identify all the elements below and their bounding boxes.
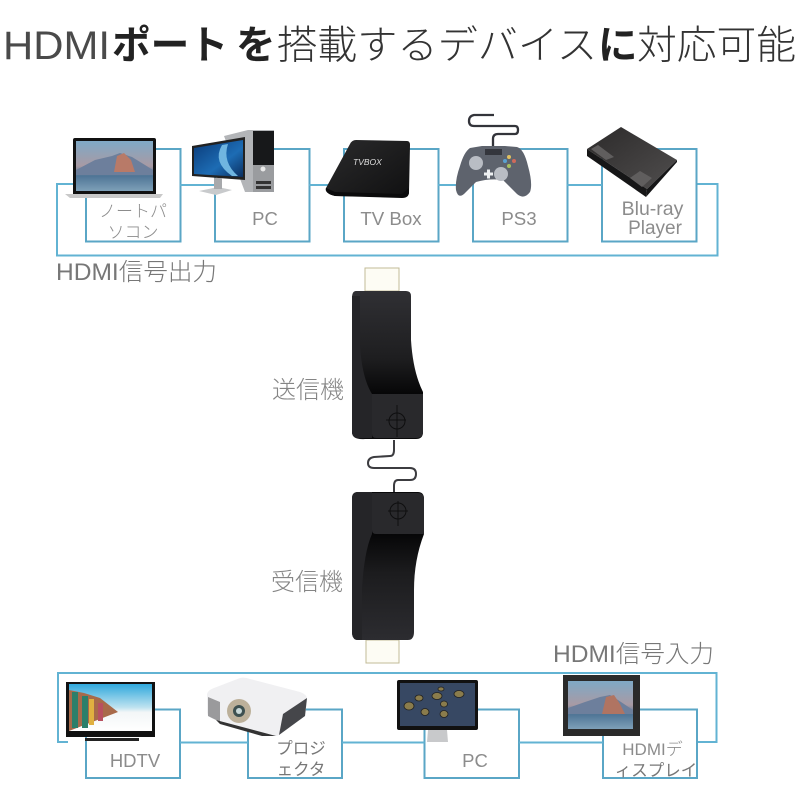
connectors <box>180 184 602 186</box>
output signal frame <box>57 184 718 256</box>
icon: laptop <box>65 138 163 198</box>
device box: projector: ェクタ <box>277 760 325 779</box>
device box: laptop: ノートパ <box>99 202 167 221</box>
icon: Blu-ray player <box>587 127 677 197</box>
title: 搭載するデバイス <box>277 24 597 68</box>
title: ポート <box>112 24 228 68</box>
title: に <box>598 24 638 68</box>
device box: PS3: PS3 <box>501 208 537 229</box>
device box: HDMI display: HDMIデ <box>622 740 683 759</box>
icon: HDTV <box>66 682 155 741</box>
device box: laptop <box>86 149 180 242</box>
connectors <box>180 742 603 744</box>
heading: HDMI output: HDMI信号出力 <box>56 259 217 286</box>
device box: laptop: ソコン <box>108 223 158 242</box>
label: transmitter: 送信機 <box>272 377 344 404</box>
panel: HDMI input devices <box>58 673 716 780</box>
device box: projector <box>248 710 342 779</box>
device box: TV Box <box>344 149 438 242</box>
title: を <box>236 24 276 68</box>
device box: PC: PC <box>252 208 278 229</box>
icon: projector <box>207 678 307 736</box>
icon: game controller <box>456 115 531 197</box>
input signal frame <box>58 673 716 742</box>
label: receiver: 受信機 <box>271 569 343 596</box>
title: 対応可能 <box>637 24 796 68</box>
device box: projector: プロジ <box>276 739 326 758</box>
device box: PS3 <box>473 149 568 242</box>
icon: PC monitor <box>397 680 478 742</box>
icon: transmitter dongle <box>352 268 423 439</box>
device box: PC <box>215 149 310 242</box>
device box: PC: PC <box>462 750 488 771</box>
device box: Blu-ray Player: Blu-ray <box>622 198 684 220</box>
device box: HDMI display <box>603 710 697 780</box>
device box: HDTV <box>86 710 180 778</box>
icon: TV box: TVBOX <box>353 157 382 167</box>
title <box>3 24 796 68</box>
device box: Blu-ray Player: Player <box>628 218 683 239</box>
device box: TV Box: TV Box <box>360 208 422 229</box>
panel: HDMI output devices <box>57 115 718 256</box>
device box: HDMI display: ィスプレイ <box>615 761 697 780</box>
device box: HDTV: HDTV <box>110 750 161 771</box>
icon: TV box <box>326 140 410 198</box>
device box: Blu-ray Player <box>602 149 696 242</box>
icon: desktop PC <box>192 130 274 195</box>
device box: PC <box>424 710 519 778</box>
heading: HDMI input: HDMI信号入力 <box>553 641 714 668</box>
title: HDMI <box>3 24 110 68</box>
icon: receiver dongle <box>352 492 424 663</box>
icon: signal cable <box>368 440 416 493</box>
icon: HDMI display <box>563 675 640 736</box>
